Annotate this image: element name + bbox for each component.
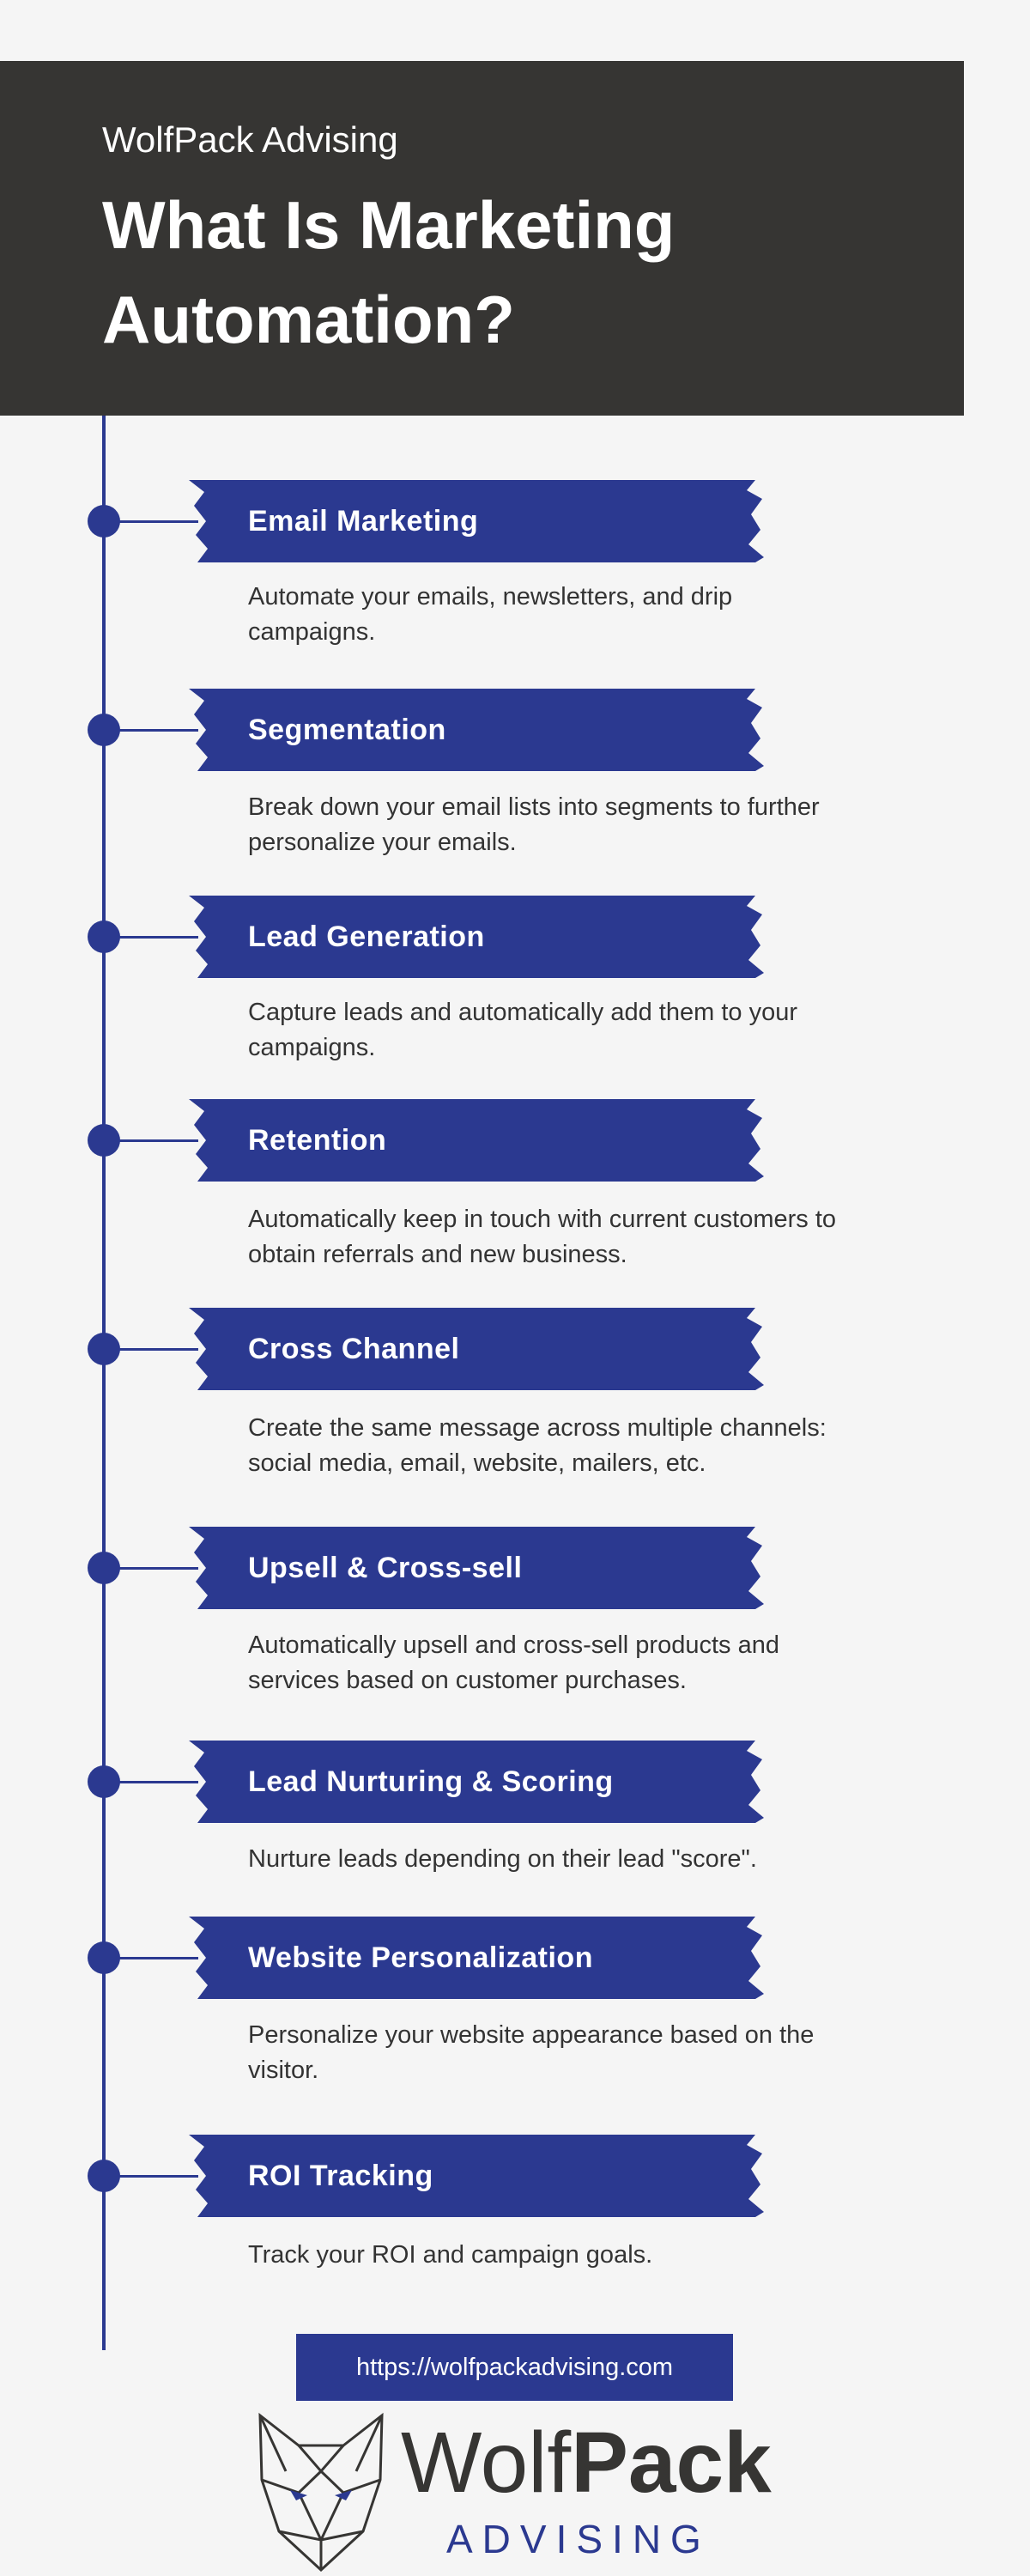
- item: Segmentation: [88, 689, 820, 856]
- item: Email Marketing: [88, 480, 764, 646]
- item: Cross Channel: [88, 1308, 827, 1477]
- item: Lead Nurturing & Scoring: Nurture leads depending on their lead "score".: [248, 1845, 757, 1873]
- item: Retention: obtain referrals and new business.: [248, 1241, 627, 1268]
- item: Email Marketing: Email Marketing: [248, 505, 478, 538]
- item: Retention: [88, 1099, 836, 1268]
- subtitle: WolfPack Advising: [102, 119, 398, 160]
- item: Lead Generation: Lead Generation: [248, 920, 485, 953]
- item: Website Personalization: [88, 1917, 814, 2084]
- item: Cross Channel: Cross Channel: [248, 1333, 459, 1365]
- item: Website Personalization: Website Personalization: [248, 1941, 593, 1974]
- item: Upsell & Cross-sell: [88, 1527, 779, 1694]
- title: Automation?: [102, 282, 515, 357]
- item: Upsell & Cross-sell: services based on customer purchases.: [248, 1667, 687, 1694]
- item: Upsell & Cross-sell: Automatically upsell and cross-sell products and: [248, 1631, 779, 1659]
- item: Retention: Retention: [248, 1124, 386, 1157]
- icon: wolf head: [258, 2413, 384, 2572]
- header panel: [0, 61, 964, 416]
- item: Email Marketing: campaigns.: [248, 618, 375, 646]
- item: ROI Tracking: ROI Tracking: [248, 2160, 433, 2192]
- item: Lead Nurturing & Scoring: Lead Nurturing & Scoring: [248, 1765, 614, 1798]
- item: Segmentation: Segmentation: [248, 714, 446, 746]
- logo: [258, 2413, 772, 2572]
- title: What Is Marketing: [102, 187, 675, 263]
- item: Cross Channel: Create the same message across multiple channels:: [248, 1414, 827, 1442]
- item: ROI Tracking: [88, 2135, 764, 2269]
- item: Segmentation: personalize your emails.: [248, 829, 517, 856]
- title: [102, 187, 675, 357]
- item: Website Personalization: visitor.: [248, 2057, 318, 2084]
- item: Website Personalization: Personalize your website appearance based on the: [248, 2021, 814, 2049]
- item: ROI Tracking: Track your ROI and campaign goals.: [248, 2241, 652, 2269]
- timeline line: [102, 416, 106, 2350]
- url box: https://wolfpackadvising.com: [356, 2354, 673, 2381]
- item: Lead Generation: campaigns.: [248, 1034, 375, 1061]
- item: Upsell & Cross-sell: Upsell & Cross-sell: [248, 1552, 522, 1584]
- item: Retention: Automatically keep in touch with current customers to: [248, 1206, 836, 1233]
- item: Lead Generation: [88, 896, 797, 1061]
- item: Lead Generation: Capture leads and automatically add them to your: [248, 999, 797, 1026]
- item: Cross Channel: social media, email, website, mailers, etc.: [248, 1449, 706, 1477]
- item: Email Marketing: Automate your emails, newsletters, and drip: [248, 583, 732, 611]
- logo text: WolfPack: [401, 2415, 772, 2511]
- logo: ADVISING: [446, 2517, 711, 2561]
- url box: [296, 2334, 733, 2401]
- item: Lead Nurturing & Scoring: [88, 1741, 764, 1873]
- item: Segmentation: Break down your email lists into segments to further: [248, 793, 820, 821]
